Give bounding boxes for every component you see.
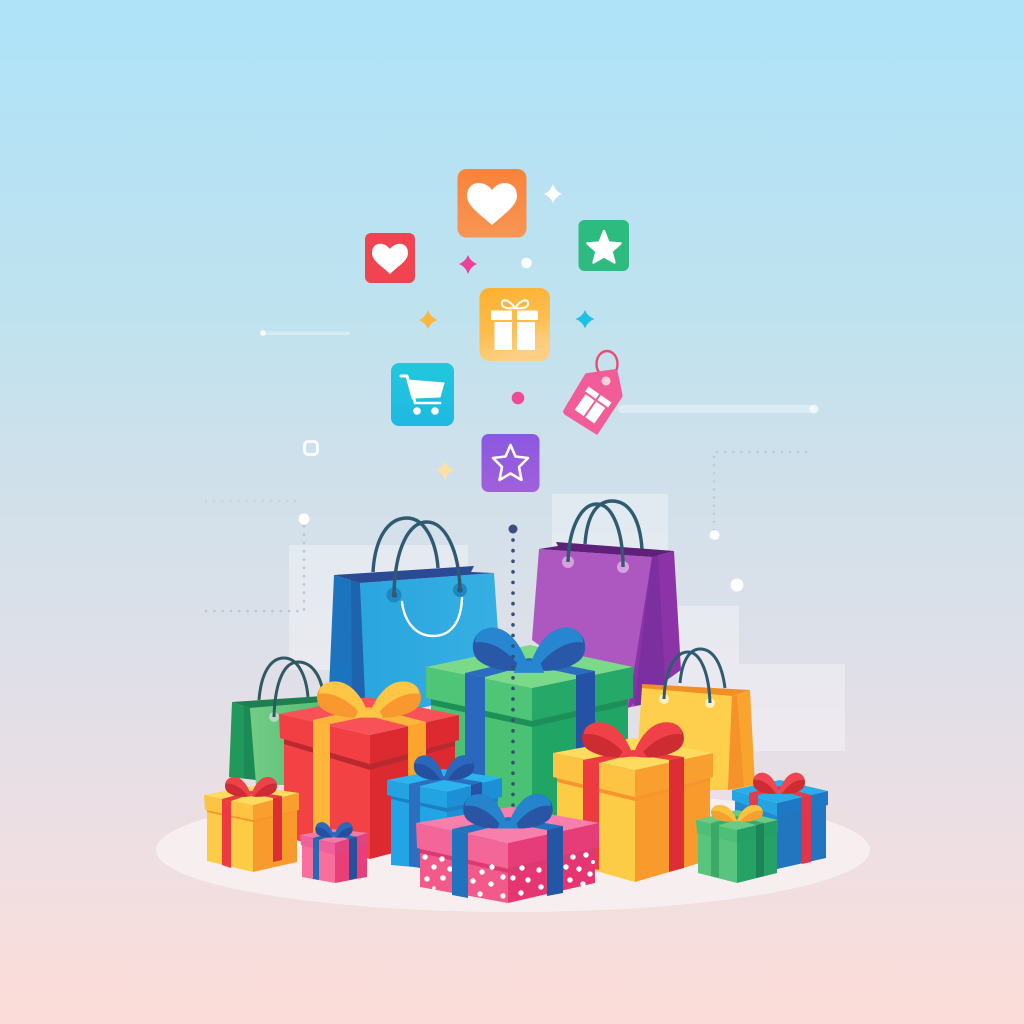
gift: red box bbox=[279, 697, 459, 859]
bag: yellow bbox=[635, 649, 755, 790]
gift: right blue box with red ribbon bbox=[732, 780, 828, 869]
tag gift glyph bbox=[573, 387, 611, 425]
gift: polka-dot pink box bbox=[416, 807, 599, 903]
gift: large green box bbox=[426, 645, 633, 835]
bow: orange on small green box bbox=[711, 805, 763, 822]
bow: orange on red box bbox=[317, 681, 421, 718]
polka dots bbox=[422, 852, 595, 899]
sparkles bbox=[419, 184, 594, 480]
bow: blue on pink box bbox=[463, 794, 553, 829]
gift: large yellow box bbox=[553, 738, 713, 882]
bow: red on yellow box bbox=[582, 722, 684, 758]
gift: small yellow box bbox=[204, 786, 299, 872]
bag: green bbox=[229, 658, 330, 785]
decorative pale panels bbox=[289, 494, 845, 751]
icon: cart tile bbox=[391, 363, 454, 426]
gift: blue box bbox=[387, 769, 502, 870]
bow: blue on green box bbox=[473, 628, 585, 673]
icon: green star tile bbox=[578, 220, 629, 271]
bow: red on right blue box bbox=[753, 773, 805, 794]
bow: blue on small pink box bbox=[315, 822, 353, 838]
bow: red on small yellow box bbox=[225, 777, 277, 797]
bow: blue on blue box bbox=[414, 755, 474, 780]
platform ellipse bbox=[156, 788, 870, 912]
dotted center line bbox=[508, 524, 518, 808]
icon: gift tile bbox=[480, 288, 550, 361]
icon: price tag with gift bbox=[564, 351, 622, 434]
gift: small green box bbox=[696, 810, 778, 883]
gift: small pink box bbox=[300, 829, 368, 883]
dotted connector lines bbox=[206, 452, 813, 611]
accent lines and dots bbox=[260, 330, 818, 592]
bag: purple bbox=[532, 501, 681, 708]
icon: orange heart tile bbox=[458, 169, 526, 238]
icon: red heart tile bbox=[365, 233, 415, 283]
bag: blue bbox=[329, 518, 502, 720]
icon: purple star tile bbox=[482, 434, 540, 492]
